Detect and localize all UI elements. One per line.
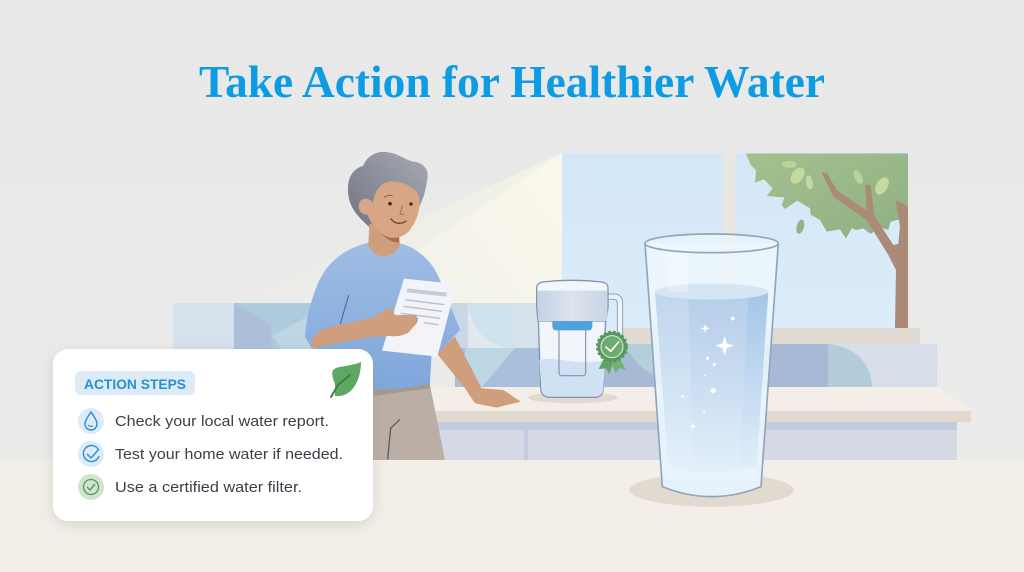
wall blocks left bbox=[173, 303, 324, 363]
trousers bbox=[372, 385, 445, 460]
water bbox=[655, 292, 768, 473]
body bbox=[305, 243, 521, 460]
tree outside window bbox=[746, 153, 908, 328]
step 2: test home water: Test your home water if needed. bbox=[115, 446, 343, 463]
hair bbox=[348, 152, 428, 228]
glass outline and rim bbox=[645, 243, 778, 497]
window bbox=[562, 153, 908, 348]
pitcher body bbox=[537, 290, 607, 397]
pitcher lid bbox=[537, 280, 608, 321]
glass body bbox=[645, 243, 778, 497]
action steps tag bbox=[75, 371, 195, 395]
near arm and hand bbox=[311, 308, 418, 348]
title: Take Action for Healthier Water bbox=[199, 56, 825, 107]
person reading report bbox=[305, 152, 521, 460]
sparkles bbox=[681, 317, 734, 430]
face bbox=[359, 181, 420, 238]
glass of water bbox=[629, 234, 794, 507]
step 3: use certified filter: Use a certified water filter. bbox=[115, 479, 302, 496]
step 3: use certified filter bbox=[78, 474, 302, 500]
wall blocks behind paper bbox=[450, 303, 605, 387]
counter bbox=[430, 387, 971, 460]
certified badge bbox=[597, 332, 627, 374]
far arm bbox=[437, 337, 521, 408]
foreground table bbox=[0, 460, 1024, 572]
wall shelf and blocks right bbox=[605, 328, 937, 387]
document bbox=[382, 279, 457, 357]
step 2: test home water bbox=[78, 441, 343, 467]
sunlight beam bbox=[236, 153, 562, 303]
pitcher shadow bbox=[528, 392, 618, 403]
icon: leaf bbox=[331, 362, 361, 397]
step 1: check water report: Check your local water report. bbox=[115, 413, 329, 430]
filter cartridge bbox=[559, 328, 586, 376]
step 1: check water report bbox=[78, 408, 329, 434]
head bbox=[348, 152, 428, 256]
action steps panel bbox=[53, 349, 373, 521]
neck bbox=[368, 223, 400, 256]
action steps tag: ACTION STEPS bbox=[84, 376, 186, 392]
water pitcher bbox=[528, 280, 627, 403]
glass shadow bbox=[629, 473, 794, 507]
shirt bbox=[305, 243, 460, 389]
pitcher handle bbox=[607, 294, 623, 335]
